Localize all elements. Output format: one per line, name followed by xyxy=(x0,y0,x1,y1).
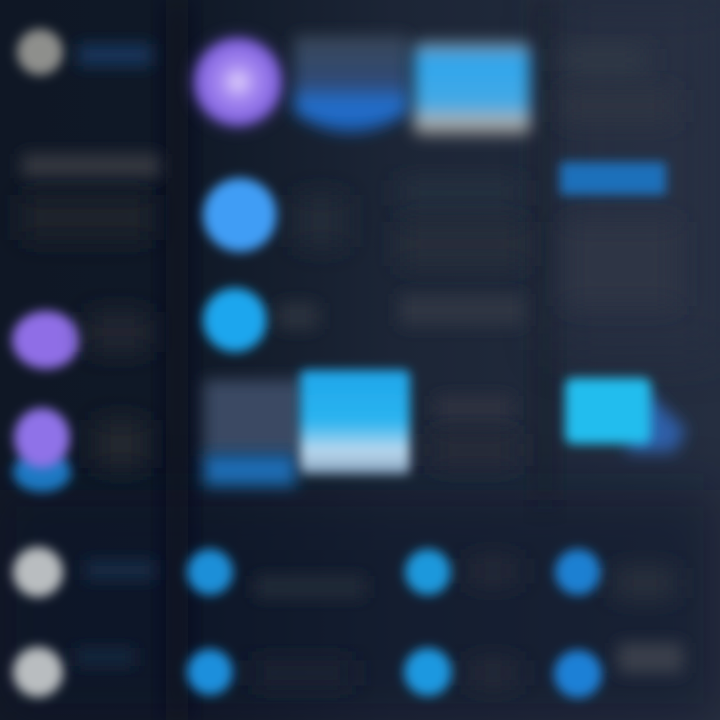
bottom rows: column 2 items xyxy=(404,549,518,696)
top row: blue image card xyxy=(294,36,408,132)
icon: blue dot xyxy=(187,549,233,595)
icon: blue dot xyxy=(554,650,602,698)
right: text block xyxy=(565,222,677,306)
bottom rows: column 3 items xyxy=(554,549,683,698)
lower right: cyan card with blue tile xyxy=(565,378,686,452)
top right: text block xyxy=(562,48,674,122)
blue button xyxy=(560,162,666,195)
icon: avatar xyxy=(17,29,63,75)
top row: cyan image card xyxy=(414,42,530,136)
middle row: blue circle icon xyxy=(203,178,346,252)
left column: purple and blue item xyxy=(13,408,147,492)
heading: blurred brand label xyxy=(78,44,152,66)
left column: text block xyxy=(22,154,160,240)
bottom rows: person 1 xyxy=(13,547,155,597)
icon: blue dot xyxy=(555,549,601,595)
lower row: slate image card xyxy=(204,380,304,486)
middle: text block xyxy=(400,180,525,266)
left column: header xyxy=(17,29,152,75)
middle: text bar xyxy=(400,294,524,326)
icon: blue dot xyxy=(404,648,452,696)
bottom rows: person 2 xyxy=(13,647,135,697)
lower row: cyan image card xyxy=(300,370,410,474)
top row: purple circle icon xyxy=(192,36,284,128)
icon: blue dot xyxy=(187,649,233,695)
bottom rows: column 1 items xyxy=(187,549,365,695)
left column: purple item xyxy=(12,311,150,369)
middle row: cyan circle icon xyxy=(203,288,318,352)
icon: avatar xyxy=(13,547,63,597)
icon: avatar xyxy=(13,647,63,697)
lower row: text block xyxy=(432,396,517,466)
icon: blue dot xyxy=(405,549,451,595)
